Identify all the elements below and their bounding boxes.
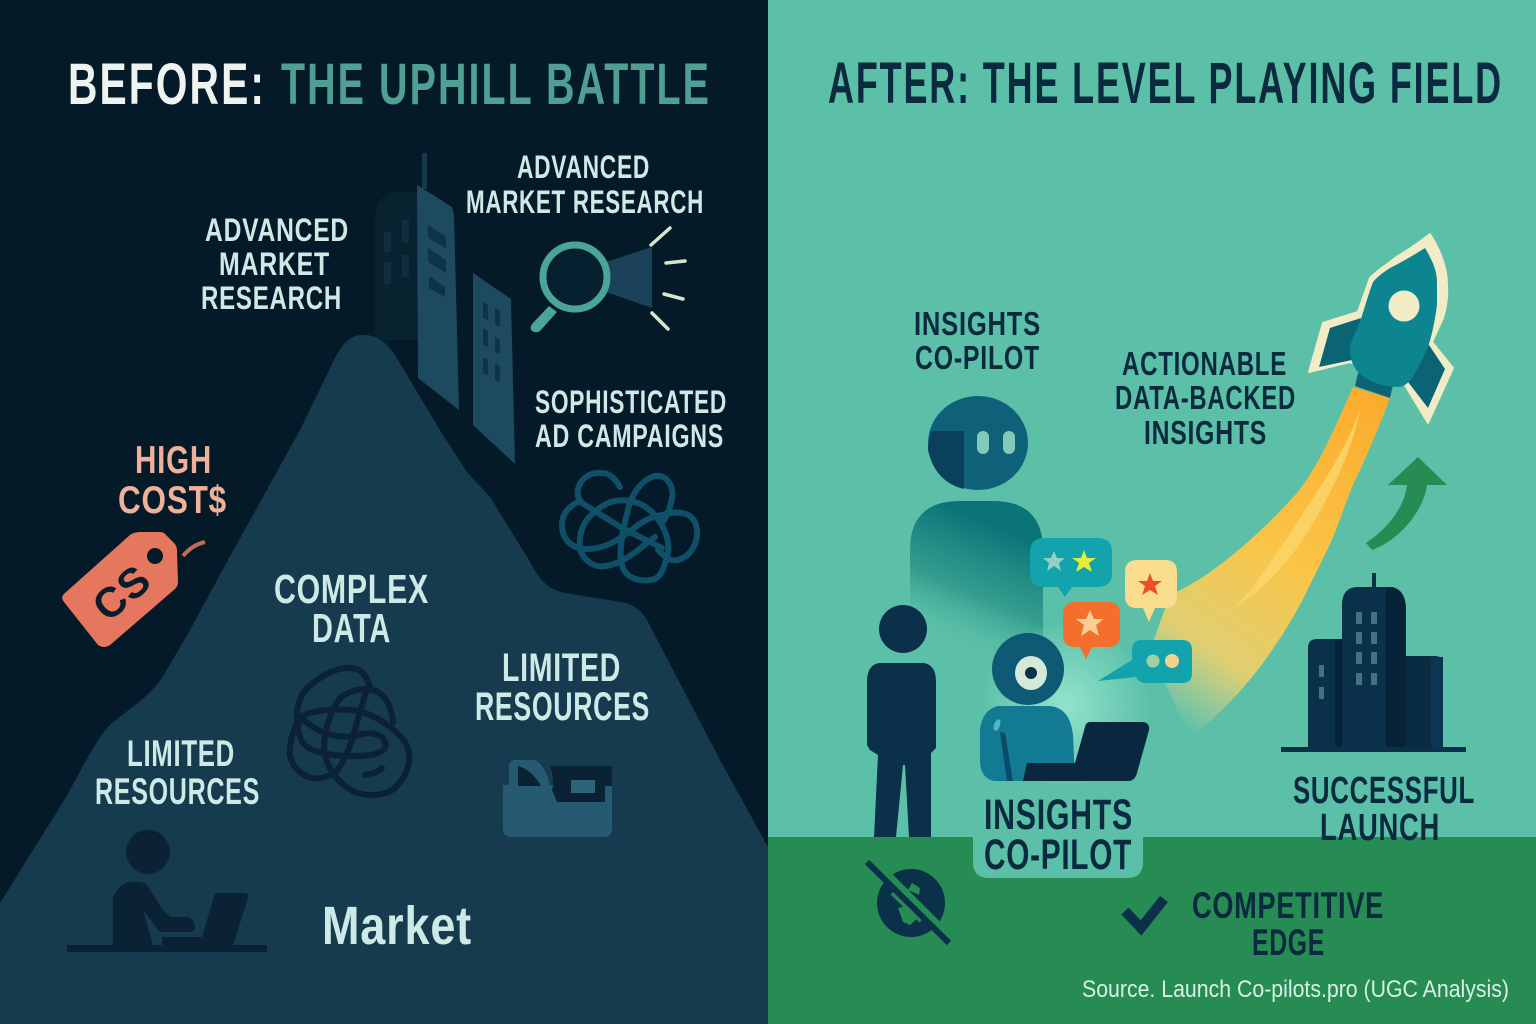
label: sophisticated ad campaigns: SOPHISTICATED	[535, 384, 727, 420]
label: limited resources, right	[475, 646, 650, 729]
label: market: Market	[322, 896, 472, 956]
label: competitive edge: COMPETITIVE	[1192, 885, 1384, 926]
icon: large co-pilot figure	[910, 396, 1043, 680]
icon: person at laptop	[67, 830, 267, 952]
label: limited resources, left: RESOURCES	[95, 771, 260, 812]
label: high costs	[118, 439, 227, 522]
mountain	[0, 335, 768, 1024]
label: advanced market research, top: ADVANCED	[517, 149, 650, 185]
label: sophisticated ad campaigns: AD CAMPAIGNS	[535, 418, 724, 454]
label: actionable data-backed insights: ACTIONABLE	[1122, 345, 1287, 382]
icon: speech bubbles	[1030, 538, 1192, 683]
label: successful launch	[1293, 770, 1475, 849]
label: complex data	[274, 566, 429, 651]
icon: check mark	[1125, 899, 1164, 928]
icon: tangled campaigns	[562, 473, 697, 581]
label: actionable data-backed insights: DATA-BACKED	[1115, 379, 1296, 416]
icon: price tag	[62, 532, 205, 647]
label: complex data: DATA	[312, 605, 391, 651]
label: limited resources, right: RESOURCES	[475, 685, 650, 729]
label: advanced market research, top	[466, 149, 704, 220]
panel: before	[0, 0, 768, 1024]
label: complex data: COMPLEX	[274, 566, 429, 612]
label: limited resources, left	[95, 733, 260, 812]
label: limited resources, left: LIMITED	[127, 733, 235, 774]
label: advanced market research, left	[201, 212, 349, 316]
label: advanced market research, left: RESEARCH	[201, 280, 342, 316]
icon: city skyline	[1281, 573, 1466, 752]
label: successful launch: LAUNCH	[1320, 807, 1440, 849]
icon: no cost	[867, 862, 949, 943]
label: insights co-pilot, top: INSIGHTS	[914, 305, 1041, 342]
icon: rocket	[1309, 234, 1453, 423]
icon: standing person	[867, 605, 936, 837]
icon: growth arrow	[1366, 457, 1447, 550]
icon: city buildings on the summit	[375, 153, 515, 464]
flame trail	[1150, 387, 1390, 738]
label: insights co-pilot, bottom: INSIGHTS	[984, 791, 1133, 839]
panel: after	[768, 0, 1536, 1024]
label: insights co-pilot, top: CO-PILOT	[915, 339, 1040, 376]
icon: toolbox	[503, 760, 612, 837]
label: advanced market research, left: MARKET	[219, 246, 330, 282]
label: actionable data-backed insights: INSIGHTS	[1144, 414, 1267, 451]
label: high costs: COST$	[118, 479, 227, 522]
ground	[768, 837, 1536, 1024]
label: insights co-pilot, bottom: CO-PILOT	[984, 831, 1132, 879]
label: advanced market research, left: ADVANCED	[205, 212, 349, 248]
title: before	[68, 52, 711, 117]
icon: tangled data	[290, 668, 409, 795]
label: high costs: HIGH	[135, 439, 212, 482]
label: competitive edge: EDGE	[1252, 922, 1325, 963]
title: before: BEFORE:	[68, 52, 266, 117]
label: actionable data-backed insights	[1115, 345, 1296, 451]
icon: price tag: CS	[83, 555, 160, 630]
title: before: THE UPHILL BATTLE	[281, 52, 711, 117]
label: limited resources, right: LIMITED	[502, 646, 621, 690]
label: competitive edge	[1192, 885, 1384, 963]
label: insights co-pilot, bottom	[973, 791, 1143, 879]
icon: seated co-pilot with laptop	[980, 633, 1149, 781]
label: advanced market research, top: MARKET RESEARCH	[466, 184, 704, 220]
glow from laptop	[980, 625, 1150, 785]
label: sophisticated ad campaigns	[535, 384, 727, 454]
icon: magnifier and megaphone	[531, 228, 685, 332]
label: insights co-pilot, top	[914, 305, 1041, 376]
